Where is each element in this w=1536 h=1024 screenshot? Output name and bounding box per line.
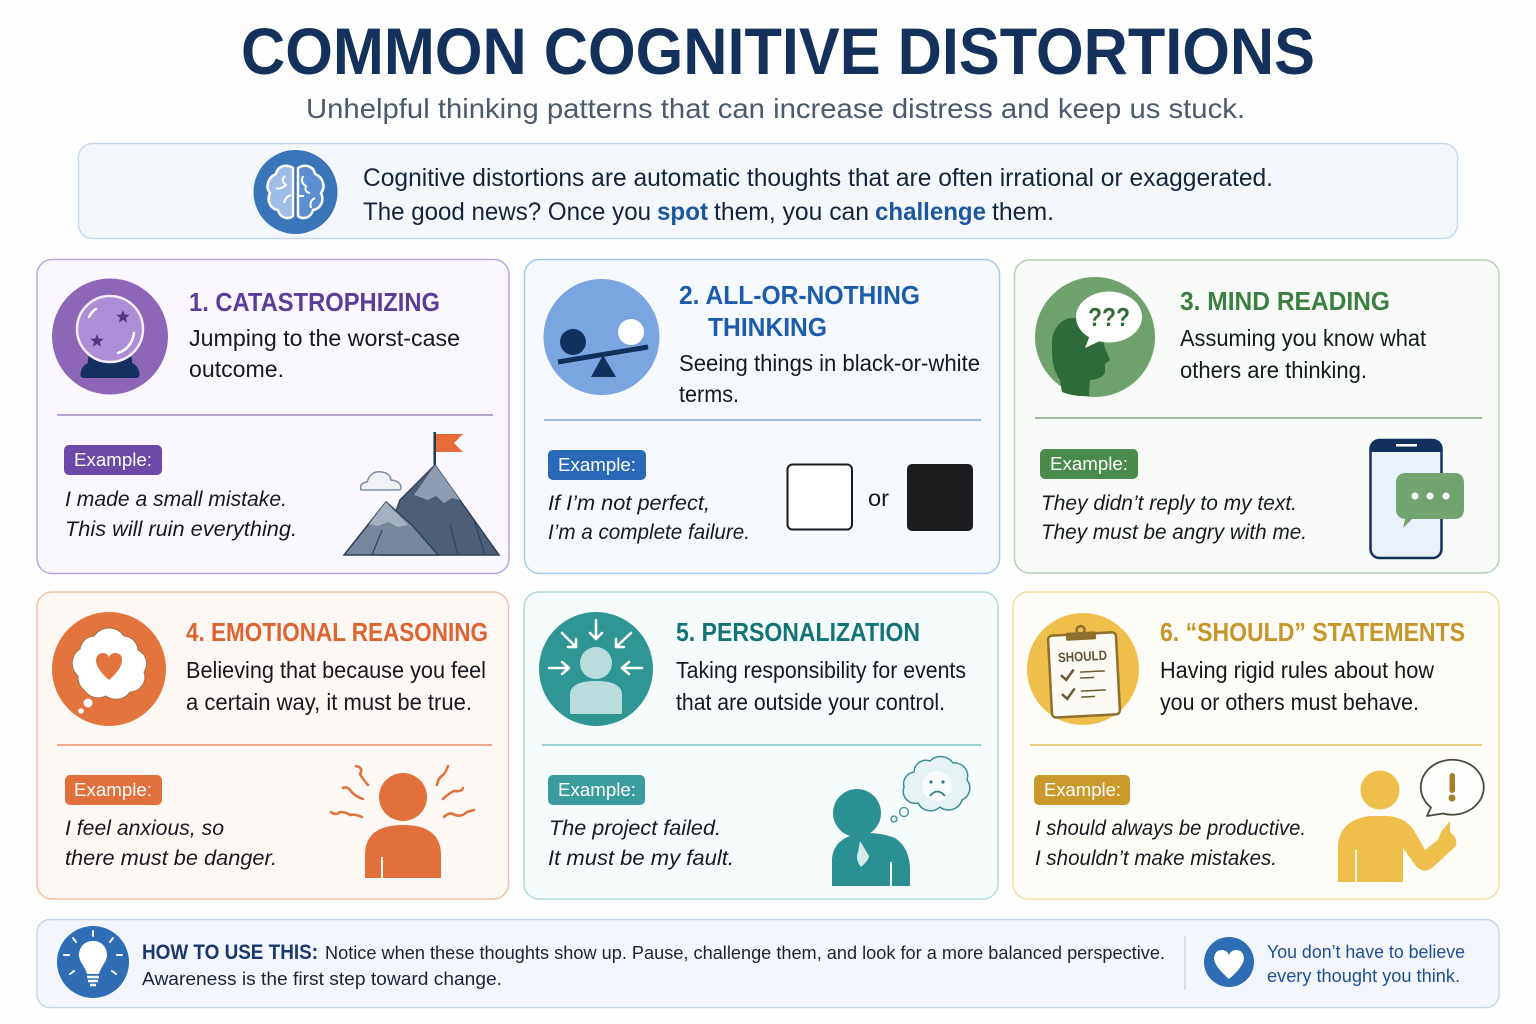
- example badge: [64, 445, 162, 475]
- description: Having rigid rules about how: [1160, 657, 1434, 683]
- example badge: [1034, 775, 1130, 805]
- reminder text: You don’t have to believe: [1267, 942, 1465, 962]
- intro text: challenge: [875, 198, 986, 226]
- heading: 5. PERSONALIZATION: [676, 619, 920, 647]
- heading: 1. CATASTROPHIZING: [189, 289, 440, 317]
- description: you or others must behave.: [1160, 689, 1419, 715]
- example text: [548, 816, 734, 870]
- icon: heart: [1204, 937, 1254, 987]
- description: Seeing things in black-or-white: [679, 350, 980, 376]
- panel: intro: [78, 144, 1458, 238]
- illustration: phone with chat bubble: [1370, 439, 1464, 558]
- example text: [1041, 491, 1307, 544]
- how-to text: Notice when these thoughts show up. Pause, challenge them, and look for a more balanced perspective.: [325, 942, 1165, 963]
- heading: [679, 282, 920, 342]
- description: Believing that because you feel: [186, 657, 486, 683]
- heading: 6. “SHOULD” STATEMENTS: [1160, 619, 1465, 647]
- icon: head with question bubble: [1035, 277, 1155, 397]
- icon: brain: [254, 150, 338, 234]
- heading: THINKING: [708, 314, 827, 342]
- example badge: Example:: [74, 779, 152, 800]
- example text: I should always be productive.: [1035, 816, 1306, 840]
- title: COMMON COGNITIVE DISTORTIONS: [241, 14, 1315, 88]
- icon: head with question bubble: ???: [1088, 302, 1130, 332]
- intro text: them, you can: [714, 198, 869, 226]
- illustration: white or black squares: [788, 464, 973, 531]
- example text: [65, 487, 297, 541]
- icon: clipboard: [1027, 613, 1139, 725]
- description: others are thinking.: [1180, 357, 1367, 383]
- example text: It must be my fault.: [548, 846, 734, 870]
- example text: I shouldn’t make mistakes.: [1035, 846, 1277, 870]
- intro text: The good news? Once you: [363, 198, 651, 226]
- how-to text: Awareness is the first step toward change.: [142, 968, 502, 989]
- example text: This will ruin everything.: [65, 517, 297, 541]
- description: [676, 657, 966, 715]
- panel: mind reading: [1014, 260, 1499, 573]
- icon: seesaw: [544, 279, 660, 395]
- example text: I’m a complete failure.: [548, 520, 750, 544]
- description: a certain way, it must be true.: [186, 689, 472, 715]
- illustration: white or black squares: or: [868, 485, 889, 511]
- example text: I feel anxious, so: [65, 816, 224, 840]
- heading: 3. MIND READING: [1180, 288, 1390, 316]
- illustration: person with sad thought: [832, 757, 970, 886]
- icon: person with inward arrows: [539, 612, 653, 726]
- illustration: person pointing with exclamation: [1338, 760, 1484, 882]
- icon: crystal ball: [52, 278, 168, 394]
- example badge: Example:: [1044, 779, 1121, 800]
- description: Assuming you know what: [1180, 325, 1427, 351]
- panel: emotional reasoning: [37, 592, 508, 899]
- reminder text: every thought you think.: [1267, 966, 1460, 986]
- description: Jumping to the worst-case: [189, 325, 460, 351]
- icon: light bulb: [57, 926, 129, 998]
- description: that are outside your control.: [676, 689, 945, 715]
- example text: They didn’t reply to my text.: [1041, 491, 1297, 515]
- example badge: [548, 450, 646, 480]
- icon: heart thought bubble: [52, 612, 166, 726]
- heading: 2. ALL-OR-NOTHING: [679, 282, 920, 310]
- panel: all-or-nothing: [524, 260, 1000, 574]
- example badge: [65, 775, 162, 805]
- description: [679, 350, 980, 407]
- reminder text: [1267, 942, 1465, 986]
- subtitle: Unhelpful thinking patterns that can increase distress and keep us stuck.: [306, 93, 1245, 124]
- example text: [548, 491, 750, 544]
- example badge: Example:: [1050, 453, 1128, 474]
- description: [1180, 325, 1427, 383]
- example text: I made a small mistake.: [65, 487, 287, 511]
- panel: personalization: [524, 592, 998, 899]
- intro text: them.: [992, 198, 1054, 226]
- example text: there must be danger.: [65, 846, 277, 870]
- heading: 4. EMOTIONAL REASONING: [186, 619, 488, 647]
- how-to text: [142, 941, 1165, 989]
- description: [189, 325, 460, 382]
- illustration: anxious person: [331, 766, 474, 878]
- intro text: Cognitive distortions are automatic thoughts that are often irrational or exaggerated.: [363, 164, 1273, 192]
- panel: how to use this: [37, 920, 1499, 1008]
- description: terms.: [679, 381, 739, 407]
- intro text: spot: [657, 198, 709, 226]
- example text: [65, 816, 277, 870]
- panel: should statements: [1013, 592, 1499, 899]
- example text: They must be angry with me.: [1041, 520, 1307, 544]
- icon: clipboard: SHOULD: [1058, 648, 1108, 665]
- example text: If I’m not perfect,: [548, 491, 710, 515]
- description: outcome.: [189, 356, 284, 382]
- example badge: [548, 775, 645, 805]
- example text: The project failed.: [549, 816, 721, 840]
- example badge: [1040, 449, 1138, 479]
- example badge: Example:: [74, 449, 152, 470]
- panel: catastrophizing: [37, 260, 509, 574]
- intro text: [363, 164, 1273, 226]
- example badge: Example:: [558, 454, 636, 475]
- description: [1160, 657, 1434, 715]
- description: Taking responsibility for events: [676, 657, 966, 683]
- how-to text: HOW TO USE THIS:: [142, 941, 318, 964]
- illustration: mountain with flag: [344, 432, 499, 555]
- description: [186, 657, 486, 715]
- example text: [1035, 816, 1306, 870]
- example badge: Example:: [558, 779, 636, 800]
